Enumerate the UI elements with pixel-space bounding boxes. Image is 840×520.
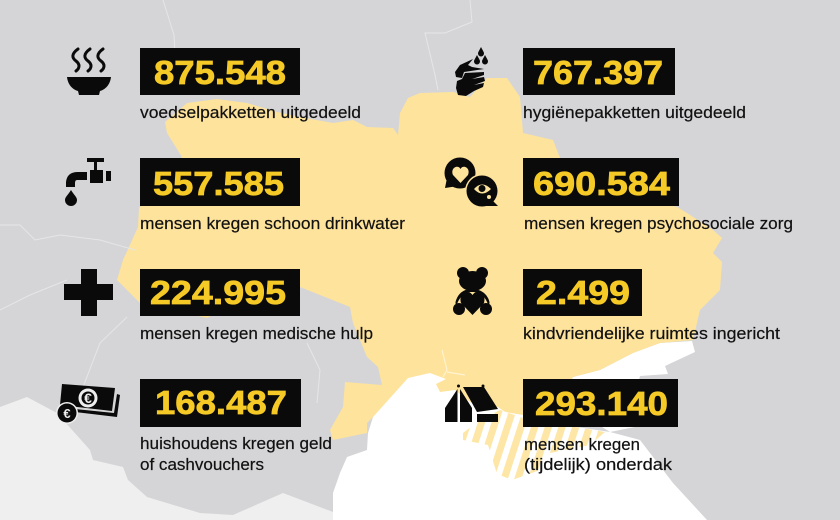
- icon: washing hands: [455, 47, 488, 96]
- number box: 168.487: [140, 379, 301, 427]
- label: geld of cashvouchers: huishoudens kregen geld: [140, 435, 332, 453]
- label: tijdelijk onderdak: mensen kregen: [524, 436, 640, 454]
- number box: 224.995: [140, 269, 300, 316]
- map: ukraine: [117, 78, 722, 440]
- icon: banknotes and coin: €: [63, 406, 71, 421]
- icon: soup bowl: [67, 49, 111, 95]
- number box: 875.548: [140, 48, 300, 95]
- number box: 168.487: 168.487: [155, 384, 287, 421]
- label: tijdelijk onderdak: (tijdelijk) onderdak: [524, 456, 673, 474]
- map: crimea: [463, 410, 605, 480]
- number box: 767.397: [523, 48, 675, 95]
- number box: 557.585: 557.585: [153, 165, 284, 202]
- number box: 2.499: [523, 269, 642, 316]
- label: medische hulp: mensen kregen medische hulp: [140, 325, 373, 343]
- icon: banknotes and coin: €: [84, 390, 92, 406]
- label: psychosociale zorg: mensen kregen psychosociale zorg: [524, 215, 793, 233]
- map: borders: [0, 0, 472, 403]
- map: sea of azov: [560, 341, 695, 432]
- label: geld of cashvouchers: [140, 435, 332, 474]
- number box: 767.397: 767.397: [533, 54, 663, 91]
- map: estuary: [442, 350, 465, 377]
- number box: 690.584: 690.584: [533, 165, 671, 202]
- label: geld of cashvouchers: of cashvouchers: [140, 456, 264, 474]
- number box: 875.548: 875.548: [154, 54, 286, 91]
- label: kindvriendelijke ruimtes: kindvriendelijke ruimtes ingericht: [523, 325, 780, 343]
- number box: 2.499: 2.499: [536, 274, 630, 311]
- map: light neighbouring land: [0, 397, 333, 520]
- map: black sea: [333, 370, 707, 520]
- number box: 224.995: 224.995: [150, 274, 286, 311]
- number box: 557.585: [140, 158, 300, 206]
- icon: medical cross: [64, 269, 113, 316]
- number box: 293.140: 293.140: [535, 385, 668, 422]
- number box: 690.584: [523, 158, 679, 206]
- icon: teddy bear: [453, 267, 492, 315]
- number box: 293.140: [523, 379, 678, 427]
- icon: water tap: [65, 158, 111, 206]
- label: voedselpakketten: voedselpakketten uitgedeeld: [140, 104, 361, 122]
- icon: banknotes and coin: [56, 384, 120, 424]
- label: tijdelijk onderdak: [524, 436, 673, 474]
- label: schoon drinkwater: mensen kregen schoon drinkwater: [140, 215, 406, 233]
- icon: speech bubbles: [444, 158, 499, 208]
- icon: tent and shelter: [445, 384, 498, 422]
- label: hygienepakketten: hygiënepakketten uitgedeeld: [523, 104, 746, 122]
